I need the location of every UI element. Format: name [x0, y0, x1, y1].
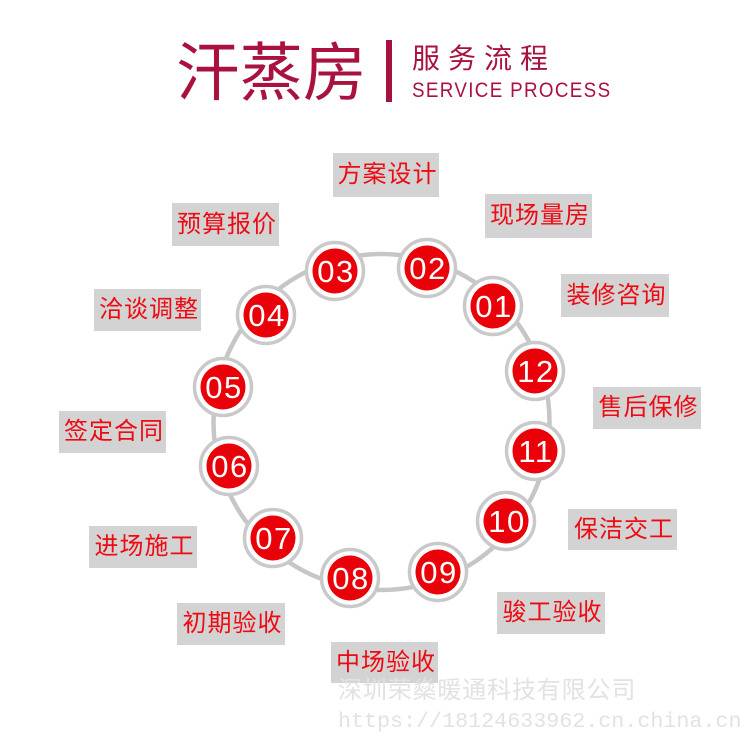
label: 装修咨询: 装修咨询: [566, 282, 666, 308]
label: 售后保修: [593, 387, 701, 429]
label: 骏工验收: 骏工验收: [502, 599, 602, 626]
label: 洽谈调整: 洽谈调整: [99, 296, 199, 323]
label: 签定合同: [59, 411, 166, 453]
label: 中场验收: 中场验收: [336, 648, 436, 676]
step 10: 10: [488, 504, 526, 539]
label: 初期验收: [177, 603, 285, 645]
step 07: [244, 510, 302, 566]
label: 售后保修: 售后保修: [598, 394, 698, 421]
step 01: [464, 278, 522, 334]
step 11: 11: [518, 434, 554, 469]
title: 汗蒸房: [176, 39, 366, 109]
step 09: 09: [420, 555, 458, 590]
label: 方案设计: 方案设计: [338, 161, 438, 188]
step 10: [478, 492, 534, 550]
subtitle Chinese: 服务流程: [412, 43, 556, 74]
label: 进场施工: 进场施工: [94, 533, 194, 560]
label: 进场施工: [89, 526, 197, 568]
step 02: [398, 240, 456, 296]
label: 预算报价: 预算报价: [177, 210, 277, 238]
step 06: [200, 438, 258, 494]
label: 预算报价: [172, 203, 279, 246]
label: 现场量房: 现场量房: [490, 202, 590, 229]
step 02: 02: [409, 251, 447, 286]
header: [176, 39, 611, 109]
label: 骏工验收: [497, 592, 605, 634]
step 08: 08: [332, 561, 370, 596]
step 05: 05: [205, 370, 243, 405]
step 08: [322, 550, 378, 606]
step 07: 07: [255, 521, 293, 556]
step 09: [410, 544, 466, 600]
label: 装修咨询: [561, 274, 669, 317]
step 04: [238, 286, 294, 344]
watermark URL: https://18124633962.cn.china.cn: [338, 709, 741, 734]
label: 中场验收: [331, 642, 438, 683]
step 06: 06: [211, 449, 249, 484]
label: 初期验收: 初期验收: [182, 610, 282, 637]
label: 现场量房: [485, 194, 592, 238]
step 11: [506, 422, 564, 480]
label: 方案设计: [333, 153, 439, 197]
step 04: 04: [248, 298, 286, 333]
watermark: [338, 677, 741, 734]
step 03: [306, 242, 364, 300]
label: 洽谈调整: [94, 289, 201, 331]
label: 保洁交工: [568, 509, 677, 550]
step 05: [194, 358, 252, 416]
title divider bar: [386, 40, 392, 102]
label: 保洁交工: 保洁交工: [574, 516, 674, 542]
step 01: 01: [475, 289, 513, 324]
subtitle English: SERVICE PROCESS: [412, 79, 611, 102]
step 12: 12: [517, 354, 555, 389]
step 03: 03: [317, 254, 355, 289]
step 12: [506, 342, 564, 400]
label: 签定合同: 签定合同: [64, 418, 164, 445]
watermark company name: 深圳荣燊暖通科技有限公司: [338, 677, 636, 704]
